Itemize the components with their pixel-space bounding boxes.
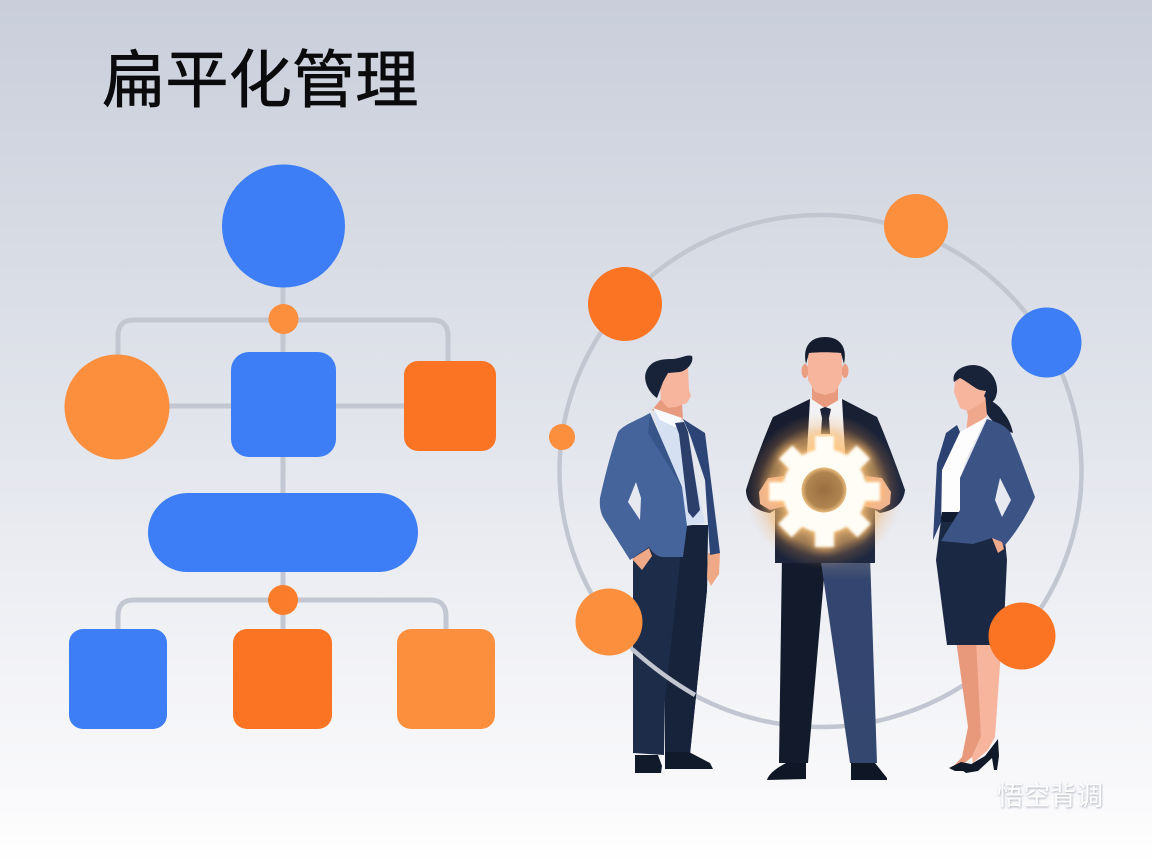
person: woman xyxy=(933,365,1035,773)
ring node: top orange xyxy=(884,194,948,258)
ponytail xyxy=(984,396,1013,433)
blouse xyxy=(942,417,987,512)
left hand in pocket xyxy=(632,548,652,570)
hand in pocket xyxy=(992,538,1004,553)
left circle node xyxy=(64,354,170,460)
ring node: lower right orange xyxy=(988,602,1056,670)
hands xyxy=(759,476,786,510)
skirt xyxy=(936,512,1007,645)
face xyxy=(954,375,985,411)
shoes xyxy=(635,755,662,773)
arm gap xyxy=(628,482,641,520)
gear glow xyxy=(746,413,902,569)
person: left man xyxy=(600,356,720,773)
jacket left panel xyxy=(933,425,960,540)
jacket xyxy=(600,413,687,560)
shirt xyxy=(806,398,848,470)
high heels xyxy=(949,762,971,771)
hair xyxy=(805,337,845,364)
orbit ring xyxy=(560,215,1082,727)
shirt xyxy=(653,411,705,526)
ring segment crossing left man's legs xyxy=(632,649,695,695)
jacket body xyxy=(941,419,1035,547)
top circle node xyxy=(222,164,345,288)
back leg xyxy=(950,640,981,770)
ring node: lower left orange xyxy=(576,588,642,656)
right square node xyxy=(404,361,496,451)
front leg xyxy=(972,640,1001,763)
title: 扁平化管理 xyxy=(102,46,418,116)
person: centre man xyxy=(746,337,905,780)
neck xyxy=(812,380,838,412)
neck xyxy=(652,398,683,420)
ring node: upper left orange xyxy=(588,267,662,341)
bottom left square xyxy=(69,629,167,729)
small connector node upper xyxy=(268,304,298,334)
hair xyxy=(645,356,692,398)
hair xyxy=(954,365,997,403)
tie xyxy=(675,422,700,518)
ring node: small left orange xyxy=(549,424,575,450)
bottom right square xyxy=(397,629,495,729)
right jacket panel xyxy=(683,419,720,555)
org chart xyxy=(64,164,496,729)
gear hole xyxy=(802,468,846,512)
face xyxy=(808,352,842,395)
jacket xyxy=(746,399,905,563)
connector lines xyxy=(118,285,448,632)
pill node xyxy=(148,493,418,572)
lapel xyxy=(648,413,682,487)
waistband xyxy=(940,512,975,522)
centre square node xyxy=(231,352,336,457)
tie xyxy=(820,407,831,434)
right hand xyxy=(707,553,720,586)
trousers xyxy=(633,525,708,755)
left shoe xyxy=(767,763,806,780)
small connector node lower xyxy=(268,585,298,615)
ring node: right blue xyxy=(1012,308,1082,378)
right shoe xyxy=(851,763,887,780)
right leg xyxy=(820,555,877,763)
face xyxy=(660,368,691,408)
neck xyxy=(964,392,987,433)
bottom centre square xyxy=(233,629,332,729)
left leg xyxy=(779,555,826,763)
watermark: 悟空背调 xyxy=(997,781,1103,811)
arm gap xyxy=(995,478,1011,517)
glowing gear xyxy=(768,435,881,548)
ears xyxy=(802,364,808,378)
